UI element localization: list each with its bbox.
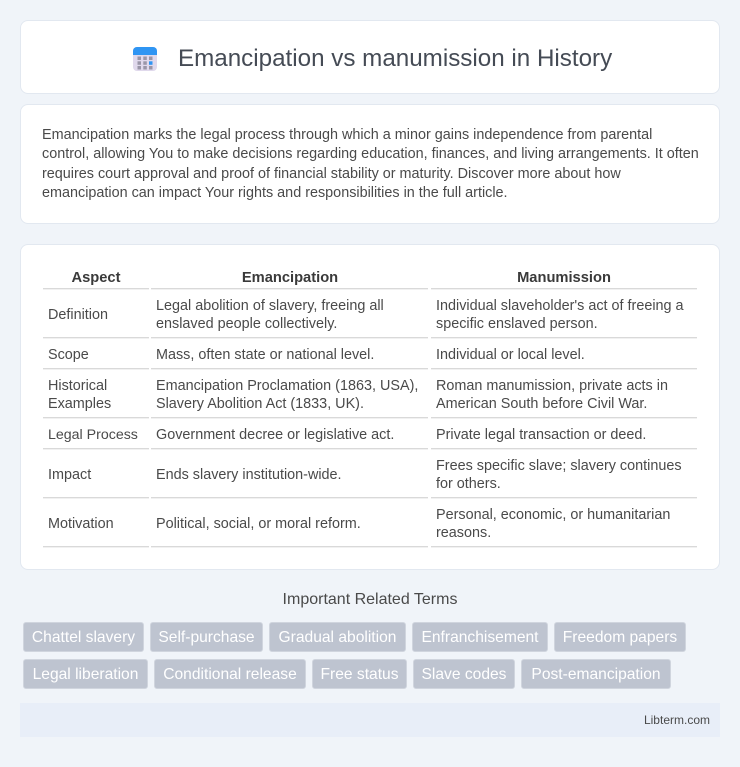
- table rows: Private legal transaction or deed.: [436, 427, 646, 443]
- header card: [20, 20, 720, 94]
- footer bar: [20, 703, 720, 737]
- table rows: Legal abolition of slavery, freeing all: [156, 298, 384, 314]
- table rows: specific enslaved person.: [436, 316, 598, 332]
- table rows: Motivation: [48, 516, 114, 532]
- table rows: Definition: [48, 307, 108, 323]
- intro text: emancipation can impact Your rights and responsibilities in the full article.: [42, 185, 508, 201]
- table rows: Slavery Abolition Act (1833, UK).: [156, 396, 364, 412]
- related terms chips: Self-purchase: [158, 629, 255, 646]
- related terms chips: Conditional release: [163, 666, 297, 683]
- table rows: Individual slaveholder's act of freeing a: [436, 298, 684, 314]
- intro text: requires court approval and proof of financial stability or maturity. Discover more about how: [42, 166, 621, 182]
- table rows: Emancipation Proclamation (1863, USA),: [156, 378, 418, 394]
- related terms chips: Gradual abolition: [279, 629, 396, 646]
- table rows: for others.: [436, 476, 501, 492]
- table rows: reasons.: [436, 525, 491, 541]
- intro text: Emancipation marks the legal process through which a minor gains independence from parental: [42, 127, 652, 143]
- table rows: Scope: [48, 347, 89, 363]
- table rows: Historical: [48, 378, 107, 394]
- table rows: Examples: [48, 396, 111, 412]
- table rows: Political, social, or moral reform.: [156, 516, 361, 532]
- related terms chips: Chattel slavery: [32, 629, 135, 646]
- table rows: [43, 288, 697, 548]
- table rows: enslaved people collectively.: [156, 316, 337, 332]
- table header row: Aspect: [72, 270, 120, 286]
- table rows: Mass, often state or national level.: [156, 347, 374, 363]
- comparison table: [43, 270, 697, 548]
- table rows: Government decree or legislative act.: [156, 427, 394, 443]
- related terms chips: Enfranchisement: [421, 629, 538, 646]
- table card: [20, 244, 720, 570]
- related terms heading: Important Related Terms: [283, 591, 457, 608]
- table header row: [72, 270, 611, 286]
- related terms chips: [23, 622, 686, 689]
- related terms chips: Freedom papers: [563, 629, 677, 646]
- table rows: Legal Process: [48, 427, 138, 443]
- related terms chips: Free status: [320, 666, 398, 683]
- table header row: Emancipation: [242, 270, 338, 286]
- table rows: Individual or local level.: [436, 347, 585, 363]
- intro text: [42, 127, 699, 201]
- related terms chips: Slave codes: [422, 666, 506, 683]
- table rows: Roman manumission, private acts in: [436, 378, 668, 394]
- table rows: Impact: [48, 467, 91, 483]
- table rows: Ends slavery institution-wide.: [156, 467, 342, 483]
- related terms chips: Legal liberation: [33, 666, 138, 683]
- intro card: [20, 104, 720, 224]
- table rows: American South before Civil War.: [436, 396, 647, 412]
- intro text: control, allowing You to make decisions regarding education, finances, and living arrangements. It often: [42, 146, 699, 162]
- table header row: Manumission: [517, 270, 611, 286]
- icon: calendar: [133, 47, 157, 71]
- footer credit: Libterm.com: [644, 713, 710, 727]
- related terms chips: Post-emancipation: [531, 666, 661, 683]
- title: Emancipation vs manumission in History: [178, 45, 612, 72]
- table rows: Personal, economic, or humanitarian: [436, 507, 670, 523]
- table rows: Frees specific slave; slavery continues: [436, 458, 682, 474]
